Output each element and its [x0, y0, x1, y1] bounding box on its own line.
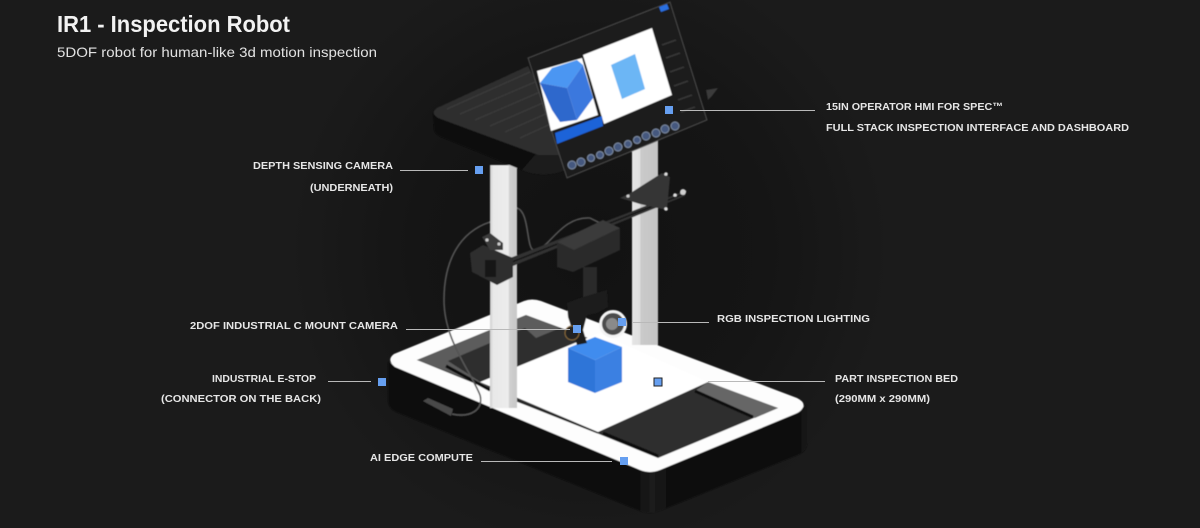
toggle — [659, 4, 669, 12]
blue cube view — [540, 60, 593, 122]
title: IR1 - Inspection Robot — [57, 11, 290, 37]
vertical post — [583, 267, 597, 299]
right well slots — [603, 391, 753, 456]
callout: AI edge compute: AI EDGE COMPUTE — [370, 452, 473, 464]
right column — [632, 130, 658, 345]
plate lower edge — [517, 401, 598, 433]
center camera block — [557, 220, 620, 272]
cube on plate — [568, 337, 622, 393]
callout: depth camera: DEPTH SENSING CAMERA — [253, 160, 393, 172]
left view — [537, 58, 598, 131]
callout: inspection bed — [654, 373, 958, 405]
callout: depth camera: (UNDERNEATH) — [310, 182, 393, 194]
base body — [388, 362, 807, 513]
right rail bracket — [620, 173, 670, 210]
callout: inspection bed: (290MM x 290MM) — [835, 393, 930, 405]
left carriage block — [470, 245, 513, 285]
callout: HMI — [665, 101, 1129, 134]
sidebar text rows — [662, 40, 695, 112]
base unit — [388, 300, 807, 513]
bezel — [528, 2, 707, 178]
rear connector — [706, 88, 718, 100]
callout: AI edge compute — [370, 452, 628, 465]
callout: inspection bed: PART INSPECTION BED — [835, 373, 958, 385]
left column — [490, 165, 517, 408]
thumbnail row — [568, 122, 679, 169]
subtitle: 5DOF robot for human-like 3d motion inspection — [57, 44, 377, 60]
left well slot — [446, 366, 490, 390]
blue button — [555, 116, 603, 144]
callout: 2DOF camera: 2DOF INDUSTRIAL C MOUNT CAMERA — [190, 320, 398, 332]
callout: HMI: 15IN OPERATOR HMI FOR SPEC™ — [826, 101, 1003, 113]
inset wells — [417, 315, 778, 458]
right well rim — [695, 382, 778, 418]
ring light — [600, 312, 626, 336]
left well rim — [417, 315, 560, 388]
robot illustration — [388, 2, 807, 513]
right view — [583, 28, 672, 124]
callout: RGB lighting: RGB INSPECTION LIGHTING — [717, 313, 870, 325]
e-stop connector — [423, 398, 453, 416]
blue rectangle — [611, 54, 645, 99]
part inspection plate — [480, 333, 708, 432]
callout: e-stop — [161, 373, 386, 405]
operator screen — [528, 2, 718, 178]
callout: depth camera — [253, 160, 483, 194]
callout: RGB lighting — [618, 313, 870, 326]
base top frame — [390, 300, 804, 472]
callout: e-stop: INDUSTRIAL E-STOP — [212, 373, 316, 385]
linear rail arm — [470, 172, 687, 299]
top shelf — [433, 66, 574, 174]
cables — [444, 208, 604, 415]
callout: HMI: FULL STACK INSPECTION INTERFACE AND DASHBOARD — [826, 122, 1129, 134]
callout: e-stop: (CONNECTOR ON THE BACK) — [161, 393, 321, 405]
callout: 2DOF camera — [190, 320, 581, 333]
2DOF camera mount — [565, 290, 608, 345]
